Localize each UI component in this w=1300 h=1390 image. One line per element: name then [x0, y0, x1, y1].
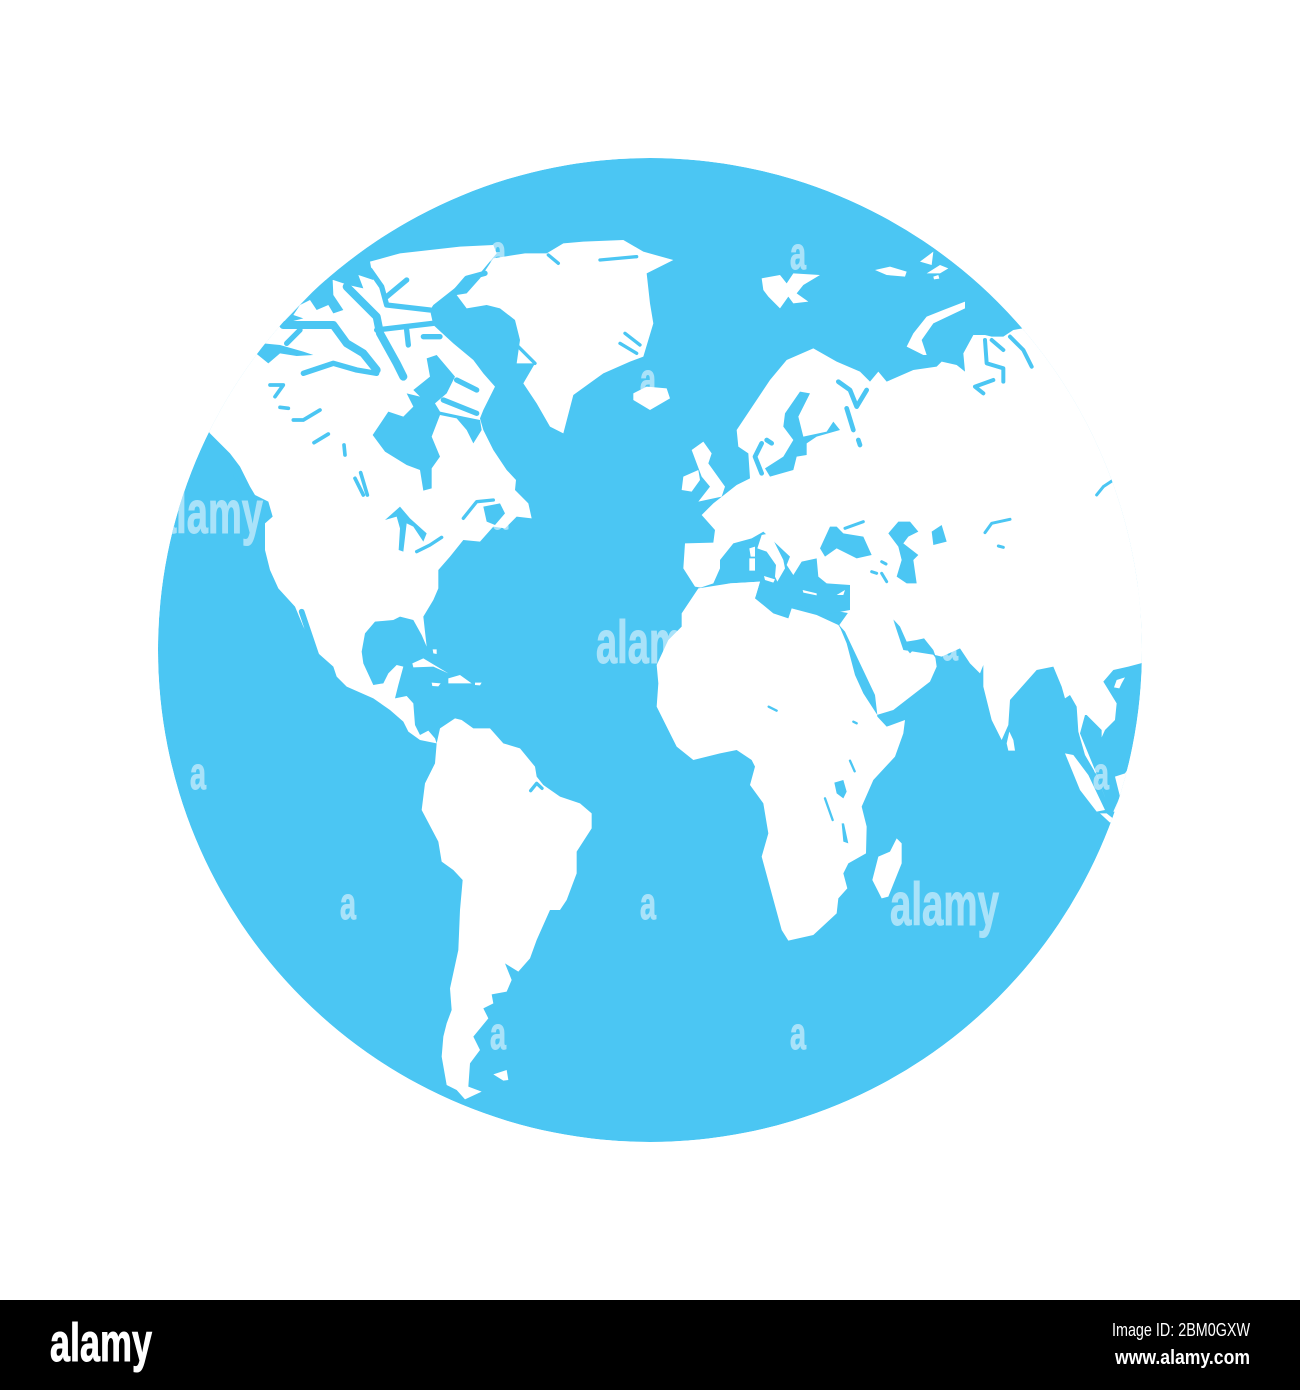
Arctic waters and Hudson Bay — [256, 255, 640, 491]
watermarks on the ocean: a — [490, 1008, 507, 1059]
Italy, Corsica, Sardinia, Sicily and Crete — [749, 533, 845, 595]
watermarks on the ocean: a — [790, 1008, 807, 1059]
watermarks on the ocean: a — [790, 228, 807, 279]
Hainan — [1114, 677, 1125, 688]
Arctic channels — [283, 287, 403, 377]
Arabia, India and Indochina — [839, 587, 1143, 800]
Great Lakes — [385, 507, 427, 552]
lakes and inlets of North America — [268, 383, 505, 654]
watermarks on the ocean: a — [190, 748, 207, 799]
watermarks on the ocean: alamy — [155, 479, 263, 546]
North America, Greenland and Iceland — [183, 240, 673, 743]
South America landmass — [422, 718, 592, 1099]
Eurasia landmass — [683, 328, 1170, 613]
watermarks on the ocean: alamy — [596, 609, 704, 676]
globe: ocean disc with continents — [155, 158, 1170, 1142]
watermarks on the ocean: a — [640, 354, 657, 405]
watermarks on the ocean: a — [640, 878, 657, 929]
Madagascar — [872, 838, 902, 898]
northern lakes — [270, 385, 367, 495]
Beaufort inlet — [256, 343, 313, 363]
image id: Image ID: 2BM0GXW — [1112, 1320, 1250, 1340]
Caspian Sea — [888, 522, 918, 583]
Sri Lanka — [1007, 732, 1015, 751]
Franz Josef Land and Severnaya Zemlya — [875, 252, 948, 279]
Arctic archipelago sea — [282, 280, 343, 324]
Gulf of Saint Lawrence basin — [483, 503, 505, 525]
Africa, Arabia, South and Southeast Asia — [657, 582, 1147, 941]
watermarks on the ocean: a — [340, 878, 357, 929]
watermarks on the ocean: a — [492, 488, 509, 539]
African lake strokes — [769, 707, 857, 820]
Europe and Asia — [682, 252, 1170, 618]
watermarks on the ocean — [155, 226, 1110, 1059]
ocean disc — [158, 158, 1142, 1142]
African lakes — [834, 780, 848, 843]
Kattegat and northern lakes — [755, 382, 867, 473]
Central Asian lakes — [872, 480, 1113, 582]
Svalbard — [762, 273, 820, 308]
Ireland — [682, 470, 700, 492]
Greenland fjords — [518, 255, 640, 363]
Mediterranean Sea — [698, 532, 850, 618]
Java — [1100, 813, 1115, 823]
Gulf of Saint Lawrence — [463, 500, 493, 518]
Hudson Bay — [373, 355, 482, 491]
Caribbean islands — [412, 649, 482, 686]
Borneo — [1113, 757, 1147, 817]
Great Britain — [692, 442, 725, 502]
Falkland Islands — [493, 1070, 508, 1081]
Gulf of California and Pacific inlets — [302, 612, 317, 656]
Africa landmass — [657, 582, 905, 941]
Iceland — [633, 387, 670, 410]
Red Sea — [839, 625, 877, 715]
Novaya Zemlya — [907, 302, 965, 355]
lower Great Lakes — [417, 537, 442, 552]
Siberian gulfs — [975, 337, 1032, 393]
Black Sea — [820, 527, 872, 558]
North America landmass — [183, 245, 532, 743]
watermarks on the ocean: a — [942, 619, 959, 670]
Amazon mouth — [531, 783, 542, 791]
footer bar — [0, 1300, 1300, 1390]
South America — [422, 718, 592, 1099]
website: www.alamy.com — [1114, 1347, 1250, 1369]
footer logo: alamy — [50, 1313, 152, 1373]
black band — [0, 1300, 1300, 1390]
Greenland — [457, 240, 673, 433]
Baltic Sea — [765, 392, 840, 477]
Sumatra — [1065, 753, 1105, 812]
Aral Sea — [932, 525, 947, 545]
watermarks on the ocean: a — [1093, 748, 1110, 799]
watermarks on the ocean: alamy — [890, 871, 999, 938]
watermarks on the ocean: a — [490, 226, 507, 277]
Persian Gulf and Gulf of Oman — [893, 619, 937, 659]
Sea of Azov — [845, 522, 863, 528]
